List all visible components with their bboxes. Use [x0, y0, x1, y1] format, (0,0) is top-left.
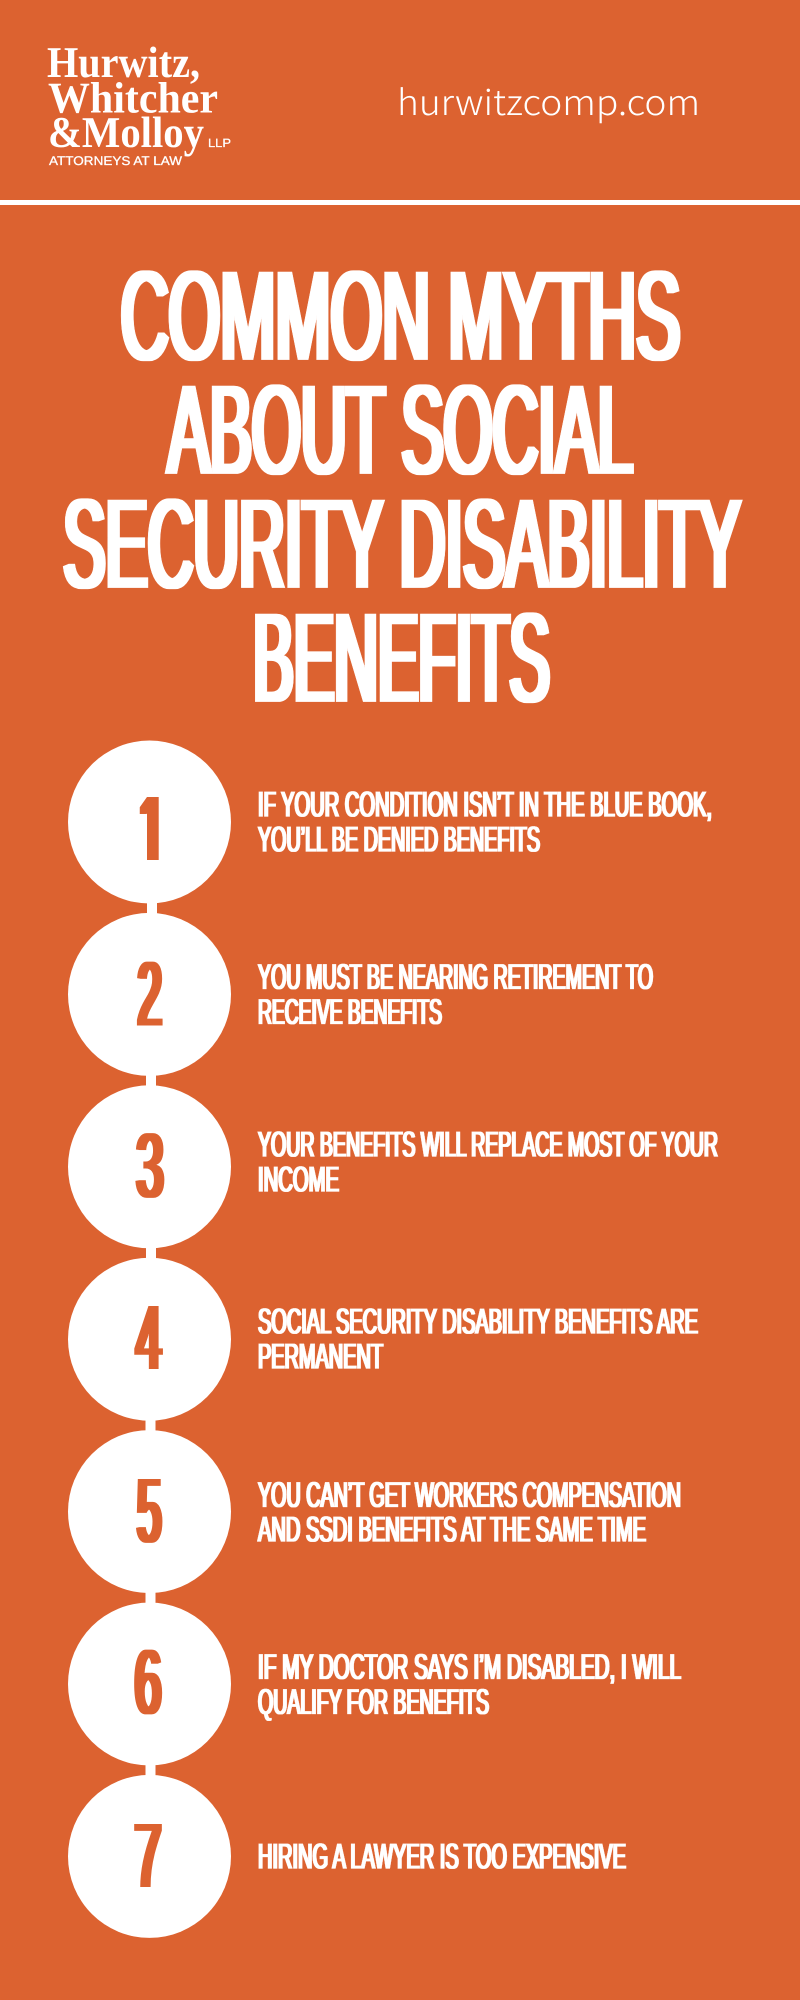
myth 1: [68, 740, 712, 904]
number badge 3: [68, 1085, 231, 1248]
number badge 5: [68, 1430, 231, 1593]
number badge 6: 6: [135, 1632, 161, 1734]
header: [47, 38, 700, 168]
number badge 7: 7: [135, 1805, 161, 1907]
logo: Whitcher: [48, 74, 218, 122]
number badge 2: 2: [138, 944, 162, 1046]
number badge 4: [68, 1258, 231, 1421]
header divider line: [0, 200, 800, 205]
website url: hurwitzcomp.com: [397, 75, 700, 126]
myth 4 text: PERMANENT: [258, 1336, 383, 1377]
myth 3: [68, 1085, 718, 1248]
number badge 7: [68, 1775, 231, 1938]
myth 4: [68, 1258, 698, 1421]
myth 4 text: [258, 1301, 698, 1377]
title: [63, 245, 741, 729]
myth 2 text: RECEIVE BENEFITS: [258, 991, 442, 1032]
myth 3 text: INCOME: [258, 1159, 339, 1200]
logo: LLP: [208, 136, 231, 150]
myth 6: [68, 1602, 681, 1766]
number badge 1: 1: [138, 778, 163, 880]
logo: Hurwitz,: [47, 38, 200, 87]
myth 6 text: [258, 1646, 681, 1722]
number badge 3: 3: [136, 1115, 164, 1217]
number badge 1: [68, 740, 231, 904]
number badge 5: 5: [137, 1460, 161, 1562]
myth timeline connectors: [146, 900, 157, 1778]
logo: ATTORNEYS AT LAW: [49, 154, 182, 168]
myth 7: [68, 1775, 626, 1938]
number badge 6: [68, 1602, 231, 1766]
myth 6 text: QUALIFY FOR BENEFITS: [258, 1681, 489, 1722]
myth 3 text: [258, 1124, 718, 1200]
myth 5 text: [258, 1474, 681, 1550]
myth 2 text: [258, 956, 653, 1032]
number badge 4: 4: [136, 1287, 161, 1389]
number badge 2: [68, 913, 231, 1076]
myth 1 text: [258, 784, 712, 860]
logo: [47, 38, 231, 168]
myth 2: [68, 913, 653, 1076]
myth 1 text: YOU’LL BE DENIED BENEFITS: [258, 819, 540, 860]
logo: &Molloy: [48, 108, 204, 157]
myth 5: [68, 1430, 681, 1593]
